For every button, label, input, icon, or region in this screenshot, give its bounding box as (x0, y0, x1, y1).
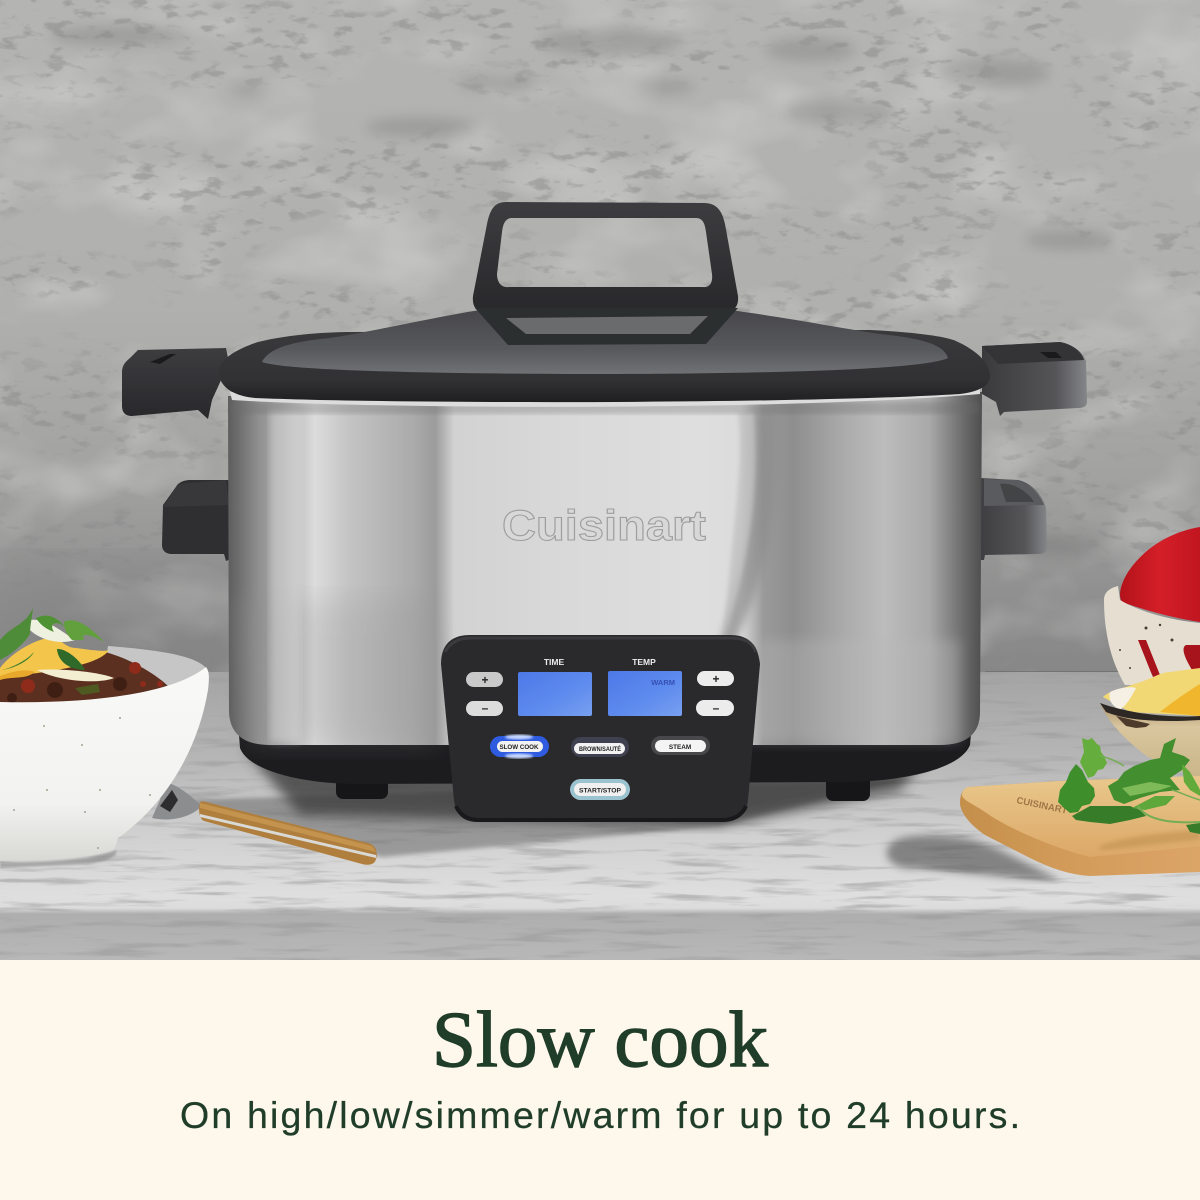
control panel (441, 635, 760, 822)
body reflections (230, 402, 980, 745)
brown saute button (571, 737, 629, 757)
slow cook button (490, 734, 549, 758)
chili bowl (0, 608, 209, 868)
start stop button: START/STOP (579, 788, 622, 794)
plus and minus buttons (466, 671, 734, 716)
left lid handle (122, 348, 228, 419)
plus and minus buttons: + (712, 672, 720, 686)
cooker feet (336, 775, 870, 801)
cutting board (960, 776, 1200, 876)
spoon (152, 782, 377, 865)
background: marble counter (0, 672, 1200, 960)
subtitle: On high/low/simmer/warm for up to 24 hours. (180, 1094, 1020, 1136)
plus and minus buttons: – (713, 701, 720, 715)
plus and minus buttons: – (482, 701, 489, 715)
cheese bowl (1100, 668, 1200, 782)
ceramic bowl (1104, 586, 1200, 685)
cheese topping (0, 636, 109, 677)
bowl interior (100, 646, 206, 700)
steam button (651, 736, 710, 755)
red pepper (1120, 527, 1200, 622)
bowl foot shadow (0, 850, 116, 868)
mode buttons (490, 734, 710, 800)
white bowl (0, 667, 209, 862)
shadow cast by cooker (180, 750, 930, 857)
lid rim (219, 330, 990, 402)
pepper bowl (1104, 527, 1200, 690)
steam button: STEAM (669, 744, 691, 751)
background: concrete wall (0, 0, 1200, 680)
caption panel (0, 960, 1200, 1200)
brown saute button: BROWN/SAUTÉ (579, 744, 622, 753)
start stop button (570, 779, 630, 800)
bowl speckles (13, 717, 151, 849)
TEMP display: WARM (651, 678, 675, 687)
slow cook button: SLOW COOK (500, 744, 539, 751)
TIME display (518, 657, 592, 716)
right lid handle (982, 342, 1087, 416)
herb garnish (0, 608, 104, 670)
glass lid (262, 310, 948, 374)
board branding: CUISINART (1015, 795, 1068, 817)
cilantro (1058, 738, 1200, 834)
plus and minus buttons: + (481, 673, 489, 687)
TEMP display: TEMP (632, 657, 656, 667)
stainless body (228, 392, 982, 745)
TEMP display (608, 657, 682, 716)
lid handle (473, 202, 738, 345)
brand name: Cuisinart (502, 502, 706, 550)
lower right side handle (972, 478, 1047, 560)
lower left side handle (162, 480, 239, 561)
chili (0, 652, 168, 704)
slow cooker (122, 202, 1087, 801)
TIME display: TIME (544, 657, 564, 667)
title: Slow cook (432, 997, 769, 1084)
cooker base (238, 722, 972, 784)
silver rim line (230, 388, 980, 407)
